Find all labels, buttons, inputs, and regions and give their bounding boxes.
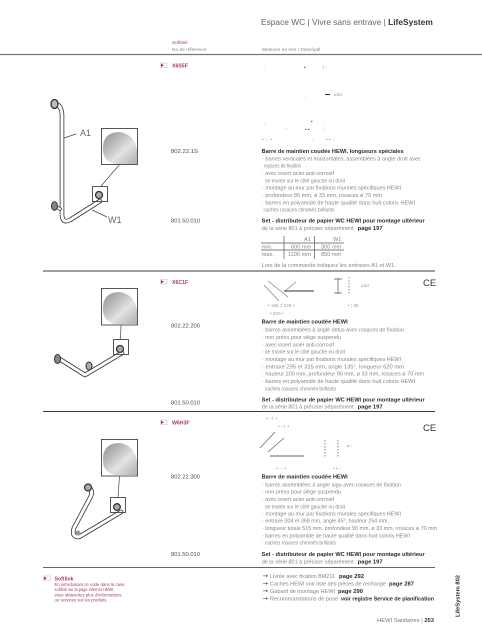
product 802.22.1S: rosaces de fixation <box>264 164 301 170</box>
product 802.22.300: · longueur totale 515 mm, profondeur 90 mm, ø 33 mm, rosaces ø 70 mm <box>262 526 437 532</box>
set 801.50.010 second: 801.50.010 <box>171 401 200 407</box>
softlink legend <box>44 576 125 603</box>
cross references: voir registre Service de planification <box>341 597 435 603</box>
product 802.22.200 <box>171 320 424 392</box>
technical drawing: X6S5F: • ·:· • <box>262 137 272 142</box>
technical drawing: W6H3F <box>260 416 354 471</box>
technical drawing: W6H3F: ⌀·:· <box>347 443 354 448</box>
product 802.22.1S: · avec insert acier anti-corrosif <box>262 171 334 177</box>
product 802.22.1S: · profondeur 90 mm, ø 33 mm, rosaces ø 70 mm <box>262 193 382 199</box>
set 801.50.010 second: de la série 801 à préciser séparément <box>262 405 354 411</box>
product 802.22.300: · entraxe 304 et 368 mm, angle 45°, hauteur 254 mm, <box>262 519 389 525</box>
technical drawing: X6C1F: ⌀33 <box>361 283 369 288</box>
technical drawing: X6S5F: .l·: <box>322 65 327 70</box>
softlink code X6S5F <box>160 63 188 70</box>
product 802.22.200: · entraxe 295 et 325 mm, angle 135°, longueur 620 mm <box>262 364 404 370</box>
cross references: page 290 <box>338 589 363 595</box>
technical drawing: X6S5F: ·:· <box>262 121 266 126</box>
dimension table A1 W1: min. <box>262 244 273 250</box>
softlink code W6H3F <box>160 420 190 426</box>
product 802.22.1S: caches rosaces chromés brillants <box>264 208 335 214</box>
CE mark: CE <box>423 278 436 289</box>
product 802.22.200: · barres en polyamide de haute qualité dans huit coloris HEWI <box>262 379 415 385</box>
softlink legend: En introduisant ce code dans la case <box>54 582 125 587</box>
cross references <box>262 572 435 603</box>
product 802.22.300: · caches rosaces chromés brillants <box>262 541 336 547</box>
softlink legend: Softlink <box>54 576 74 582</box>
technical drawing: X6S5F: ·: <box>303 95 306 100</box>
page footer: HEWI Sanitaires | 253 <box>377 618 435 624</box>
product 802.22.1S: · se monte sur le côté gauche ou droit <box>262 178 345 184</box>
dimension table A1 W1: W1 <box>333 237 341 243</box>
dimension table A1 W1: A1 <box>304 237 311 243</box>
technical drawing: X6C1F: • ¦ 90 <box>348 303 359 308</box>
technical drawing: X6S5F: • • ·: <box>326 137 335 142</box>
product 802.22.200: · montage au mur par fixations murales spécifiques HEWI <box>262 357 401 363</box>
technical drawing: X6S5F: ·: <box>262 65 265 70</box>
set 801.50.010 first: 801.50.010 <box>171 219 200 225</box>
product 802.22.200: · caches rosaces chromés brillants <box>262 386 336 392</box>
product 802.22.200: · se monte sur le côté gauche ou droit <box>262 350 345 356</box>
softlink legend: ou services sur les produits <box>54 598 106 603</box>
set 801.50.010 first: page 197 <box>358 226 383 232</box>
grab bar illustration 1 with A1 and W1: A1 <box>80 128 91 138</box>
technical drawing: X6S5F: ·:· <box>310 137 314 142</box>
cross references: page 292 <box>339 574 364 580</box>
technical drawing: W6H3F: • ·:l· • <box>266 416 278 421</box>
column heading: softlink and reference: Softlink <box>172 40 188 46</box>
column heading: softlink and reference <box>172 40 207 53</box>
product 802.22.300 <box>171 475 437 547</box>
cross references: Livrée avec fixation BM211 <box>270 574 335 580</box>
product 802.22.200: 802.22.200 <box>171 323 200 329</box>
technical drawing: X6S5F: ·:· <box>284 126 288 131</box>
product 802.22.300: · non prévu pour siège suspendu <box>262 490 341 496</box>
technical drawing: X6S5F: :· <box>323 127 326 132</box>
dimension table A1 W1: max. <box>262 252 274 258</box>
technical drawing: X6S5F: • <box>304 65 306 70</box>
vertical side label: LifeSystem 802 <box>456 575 462 617</box>
softlink code X6C1F <box>160 280 188 286</box>
technical drawing: X6S5F: ·: <box>322 120 325 125</box>
dimension table A1 W1: 1100 mm <box>288 252 311 258</box>
cross references: Gabarit de montage HEWI <box>270 589 335 595</box>
product 802.22.300: · barres en polyamide de haute qualité dans huit coloris HEWI <box>262 533 410 539</box>
set 801.50.010 first: Set - distributeur de papier WC HEWI pour montage ultérieur <box>262 219 426 225</box>
set 801.50.010 third: de la série 801 à préciser séparément <box>262 559 354 565</box>
softlink code X6S5F: X6S5F <box>172 64 188 70</box>
cross references: Caches HEWI voir liste des pièces de rechange <box>270 582 386 588</box>
grab bar illustration 1 with A1 and W1: W1 <box>108 215 122 225</box>
product 802.22.1S: · montage au mur par fixations murales spécifiques HEWI <box>262 186 401 192</box>
grab bar illustration 1 with A1 and W1 <box>51 100 138 225</box>
cross references: → <box>262 572 268 580</box>
softlink legend: vous obtiendrez plus d'informations <box>54 592 122 597</box>
page header title: Espace WC | Vivre sans entrave | LifeSystem <box>261 17 433 27</box>
product 802.22.200: · hauteur 200 mm, profondeur 90 mm, ø 33 mm, rosaces ø 70 mm <box>262 372 424 378</box>
product 802.22.300: 802.22.300 <box>171 475 200 481</box>
column heading: measures: Mesures en mm / Descriptif <box>262 47 321 53</box>
softlink legend: softlink sur la page internet HEWI, <box>54 587 114 592</box>
set 801.50.010 third: Set - distributeur de papier WC HEWI pour montage ultérieur <box>262 552 426 558</box>
product 802.22.300: · montage au mur par fixations murales spécifiques HEWI <box>262 511 401 517</box>
technical drawing: W6H3F: • ·:l· • <box>278 424 290 429</box>
CE mark: CE <box>423 423 436 434</box>
product 802.22.300: · barres assemblées à angle aigu avec rosaces de fixation <box>262 482 401 488</box>
product 802.22.200: · barres assemblées à angle obtus avec rosaces de fixation <box>262 328 404 334</box>
order note: Lors de la commande indiquez les entraxes A1 et W1. <box>262 263 396 269</box>
technical drawing: X6S5F: • • <box>305 127 310 132</box>
grab bar illustration 3 <box>73 440 138 537</box>
cross references: Recommandations de pose <box>270 597 338 603</box>
product 802.22.1S: 802.22.1S <box>171 149 198 155</box>
cross references: → <box>262 595 268 603</box>
set 801.50.010 second: Set - distributeur de papier WC HEWI pour montage ultérieur <box>262 397 426 403</box>
technical drawing: W6H3F: • • ·: <box>333 466 342 471</box>
set 801.50.010 second <box>171 397 426 411</box>
dimension table A1 W1: 850 mm <box>321 252 342 258</box>
product 802.22.200: · non prévu pour siège suspendu <box>262 335 341 341</box>
technical drawing: X6S5F: • <box>311 119 313 124</box>
product 802.22.200: Barre de maintien coudée HEWI <box>262 320 348 326</box>
dimension table A1 W1 <box>261 236 344 259</box>
softlink code W6H3F: W6H3F <box>172 420 190 426</box>
technical drawing: X6C1F: • 520 • <box>270 311 284 316</box>
dimension table A1 W1: 600 mm <box>291 244 312 250</box>
product 802.22.300: · se monte sur le côté gauche ou droit <box>262 504 345 510</box>
set 801.50.010 third: 801.50.010 <box>171 552 200 558</box>
dimension table A1 W1: 300 mm <box>321 244 342 250</box>
technical drawing: W6H3F: • ·:· • <box>276 466 286 471</box>
column heading: softlink and reference: No de référence <box>172 47 207 53</box>
cross references: → <box>262 580 268 588</box>
product 802.22.200: · avec insert acier anti-corrosif <box>262 342 334 348</box>
set 801.50.010 first <box>171 219 426 232</box>
technical drawing: X6C1F <box>264 277 369 316</box>
set 801.50.010 third: page 197 <box>358 559 383 565</box>
technical drawing: X6S5F <box>262 65 342 142</box>
product 802.22.1S: · barres en polyamide de haute qualité dans huit coloris HEWI <box>262 200 415 206</box>
softlink code X6C1F: X6C1F <box>172 280 188 286</box>
grab bar illustration 2 <box>54 288 138 375</box>
cross references: page 287 <box>389 582 414 588</box>
cross references: → <box>262 587 268 595</box>
set 801.50.010 first: de la série 801 à préciser séparément <box>262 226 354 232</box>
technical drawing: X6C1F: • 165 ‡ 325 • <box>268 303 295 308</box>
product 802.22.1S: · barres verticales et horizontales, assemblées à angle droit avec <box>262 156 421 162</box>
product 802.22.300: · avec insert acier anti-corrosif <box>262 497 334 503</box>
product 802.22.1S: Barre de maintien coudée HEWI, longueurs spéciales <box>262 149 404 155</box>
product 802.22.300: Barre de maintien coudée HEWI <box>262 475 348 481</box>
technical drawing: X6S5F: ⌀33 <box>334 92 342 97</box>
set 801.50.010 second: page 197 <box>358 405 383 411</box>
set 801.50.010 third <box>171 552 426 565</box>
product 802.22.1S <box>171 149 421 214</box>
